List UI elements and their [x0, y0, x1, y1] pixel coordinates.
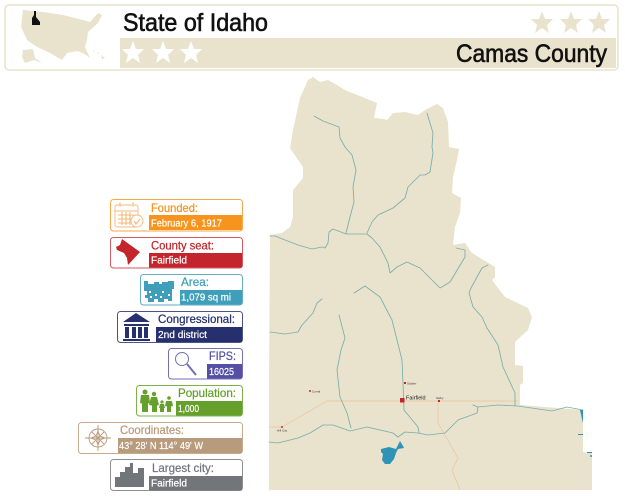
label: Coordinates:	[120, 423, 184, 437]
label: Largest city:	[152, 461, 214, 475]
icon: DC shape	[116, 239, 140, 265]
value: 16025	[209, 366, 234, 378]
panel: area	[140, 274, 242, 305]
icon: family	[140, 390, 173, 412]
panel: congressional	[118, 312, 242, 342]
city: Fairfield: Fairfield	[406, 396, 426, 402]
label: County seat:	[151, 238, 214, 252]
rivers	[269, 113, 583, 443]
icon: calendar	[115, 202, 143, 227]
city: Hill City: Hill City	[277, 428, 288, 432]
title: State of Idaho	[123, 9, 268, 37]
header band	[120, 38, 616, 68]
county name: Camas County	[456, 40, 607, 68]
value: February 6, 1917	[151, 218, 222, 230]
city: Corral: Corral	[312, 390, 321, 394]
value: 1,079 sq mi	[181, 292, 231, 304]
icon: US map with Idaho	[21, 10, 105, 63]
east water	[578, 410, 592, 457]
panel: largest city	[110, 460, 242, 490]
icon: compass	[85, 425, 111, 451]
city: Selby	[436, 396, 444, 402]
panel: population	[136, 386, 242, 416]
value: 2nd district	[158, 329, 207, 341]
panel: coordinates	[78, 422, 242, 454]
icon: magnifier	[176, 352, 196, 375]
roads	[269, 401, 518, 490]
icon: pixel map	[144, 281, 174, 302]
value: Fairfield	[151, 478, 187, 490]
county shape	[269, 77, 592, 490]
value: 1,000	[178, 403, 199, 415]
panel: county seat	[110, 238, 242, 268]
value: 43° 28' N 114° 49' W	[119, 440, 203, 452]
header panel	[5, 5, 618, 70]
label: FIPS:	[209, 349, 236, 363]
icon: right stars	[531, 11, 610, 33]
city: Hill City	[277, 426, 288, 432]
panel: founded	[110, 200, 242, 231]
label: Founded:	[151, 201, 198, 215]
city: Soldier: Soldier	[407, 382, 416, 386]
label: Area:	[181, 275, 209, 289]
icon: skyline	[115, 463, 144, 487]
icon: bank	[123, 313, 150, 341]
icon: left stars	[122, 41, 202, 63]
city: Selby: Selby	[436, 396, 444, 400]
city: Fairfield	[400, 396, 426, 402]
lake	[381, 441, 404, 464]
label: Population:	[178, 386, 236, 400]
panel: FIPS	[168, 348, 242, 379]
label: Congressional:	[158, 312, 235, 326]
county map	[269, 77, 592, 490]
value: Fairfield	[151, 254, 187, 266]
